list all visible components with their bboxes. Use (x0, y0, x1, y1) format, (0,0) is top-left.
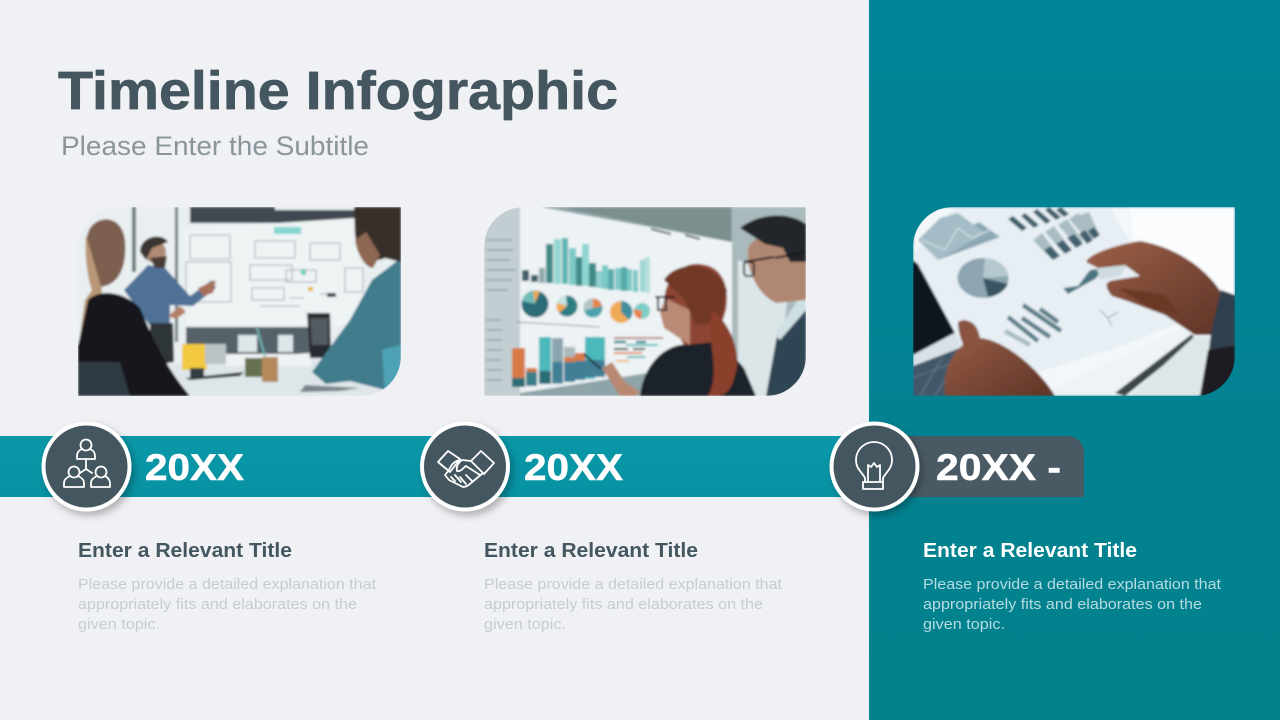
text block 1: Enter a Relevant Title (78, 540, 292, 562)
year label 2: 20XX (524, 447, 623, 488)
photo: hands holding chart report (913, 207, 1235, 396)
year label 3: 20XX - (936, 447, 1061, 488)
text block 3: appropriately fits and elaborates on the (923, 596, 1202, 613)
text block 2: given topic. (484, 616, 566, 633)
icon circle 2: handshake (420, 422, 510, 512)
title: Timeline Infographic (58, 61, 618, 121)
text block 2 (484, 540, 783, 633)
photo: analysts reviewing dashboard screen (484, 207, 806, 396)
icon circle 3: light bulb (830, 422, 920, 512)
text block 1: Please provide a detailed explanation that (78, 576, 377, 593)
subtitle: Please Enter the Subtitle (61, 131, 369, 161)
text block 2: Please provide a detailed explanation that (484, 576, 783, 593)
text block 2: Enter a Relevant Title (484, 540, 698, 562)
text block 3: Please provide a detailed explanation that (923, 576, 1222, 593)
timeline band: teal (0, 436, 850, 497)
year label 1: 20XX (145, 447, 244, 488)
photo: team meeting at whiteboard (78, 207, 401, 396)
text block 1: given topic. (78, 616, 160, 633)
text block 2: appropriately fits and elaborates on the (484, 596, 763, 613)
panel: teal right column (869, 0, 1280, 720)
text block 1 (78, 540, 377, 633)
text block 3: Enter a Relevant Title (923, 540, 1137, 562)
timeline band: dark end segment (860, 436, 1084, 497)
text block 3: given topic. (923, 616, 1005, 633)
icon circle 1: organization people (42, 422, 132, 512)
text block 3 (923, 540, 1222, 633)
text block 1: appropriately fits and elaborates on the (78, 596, 357, 613)
